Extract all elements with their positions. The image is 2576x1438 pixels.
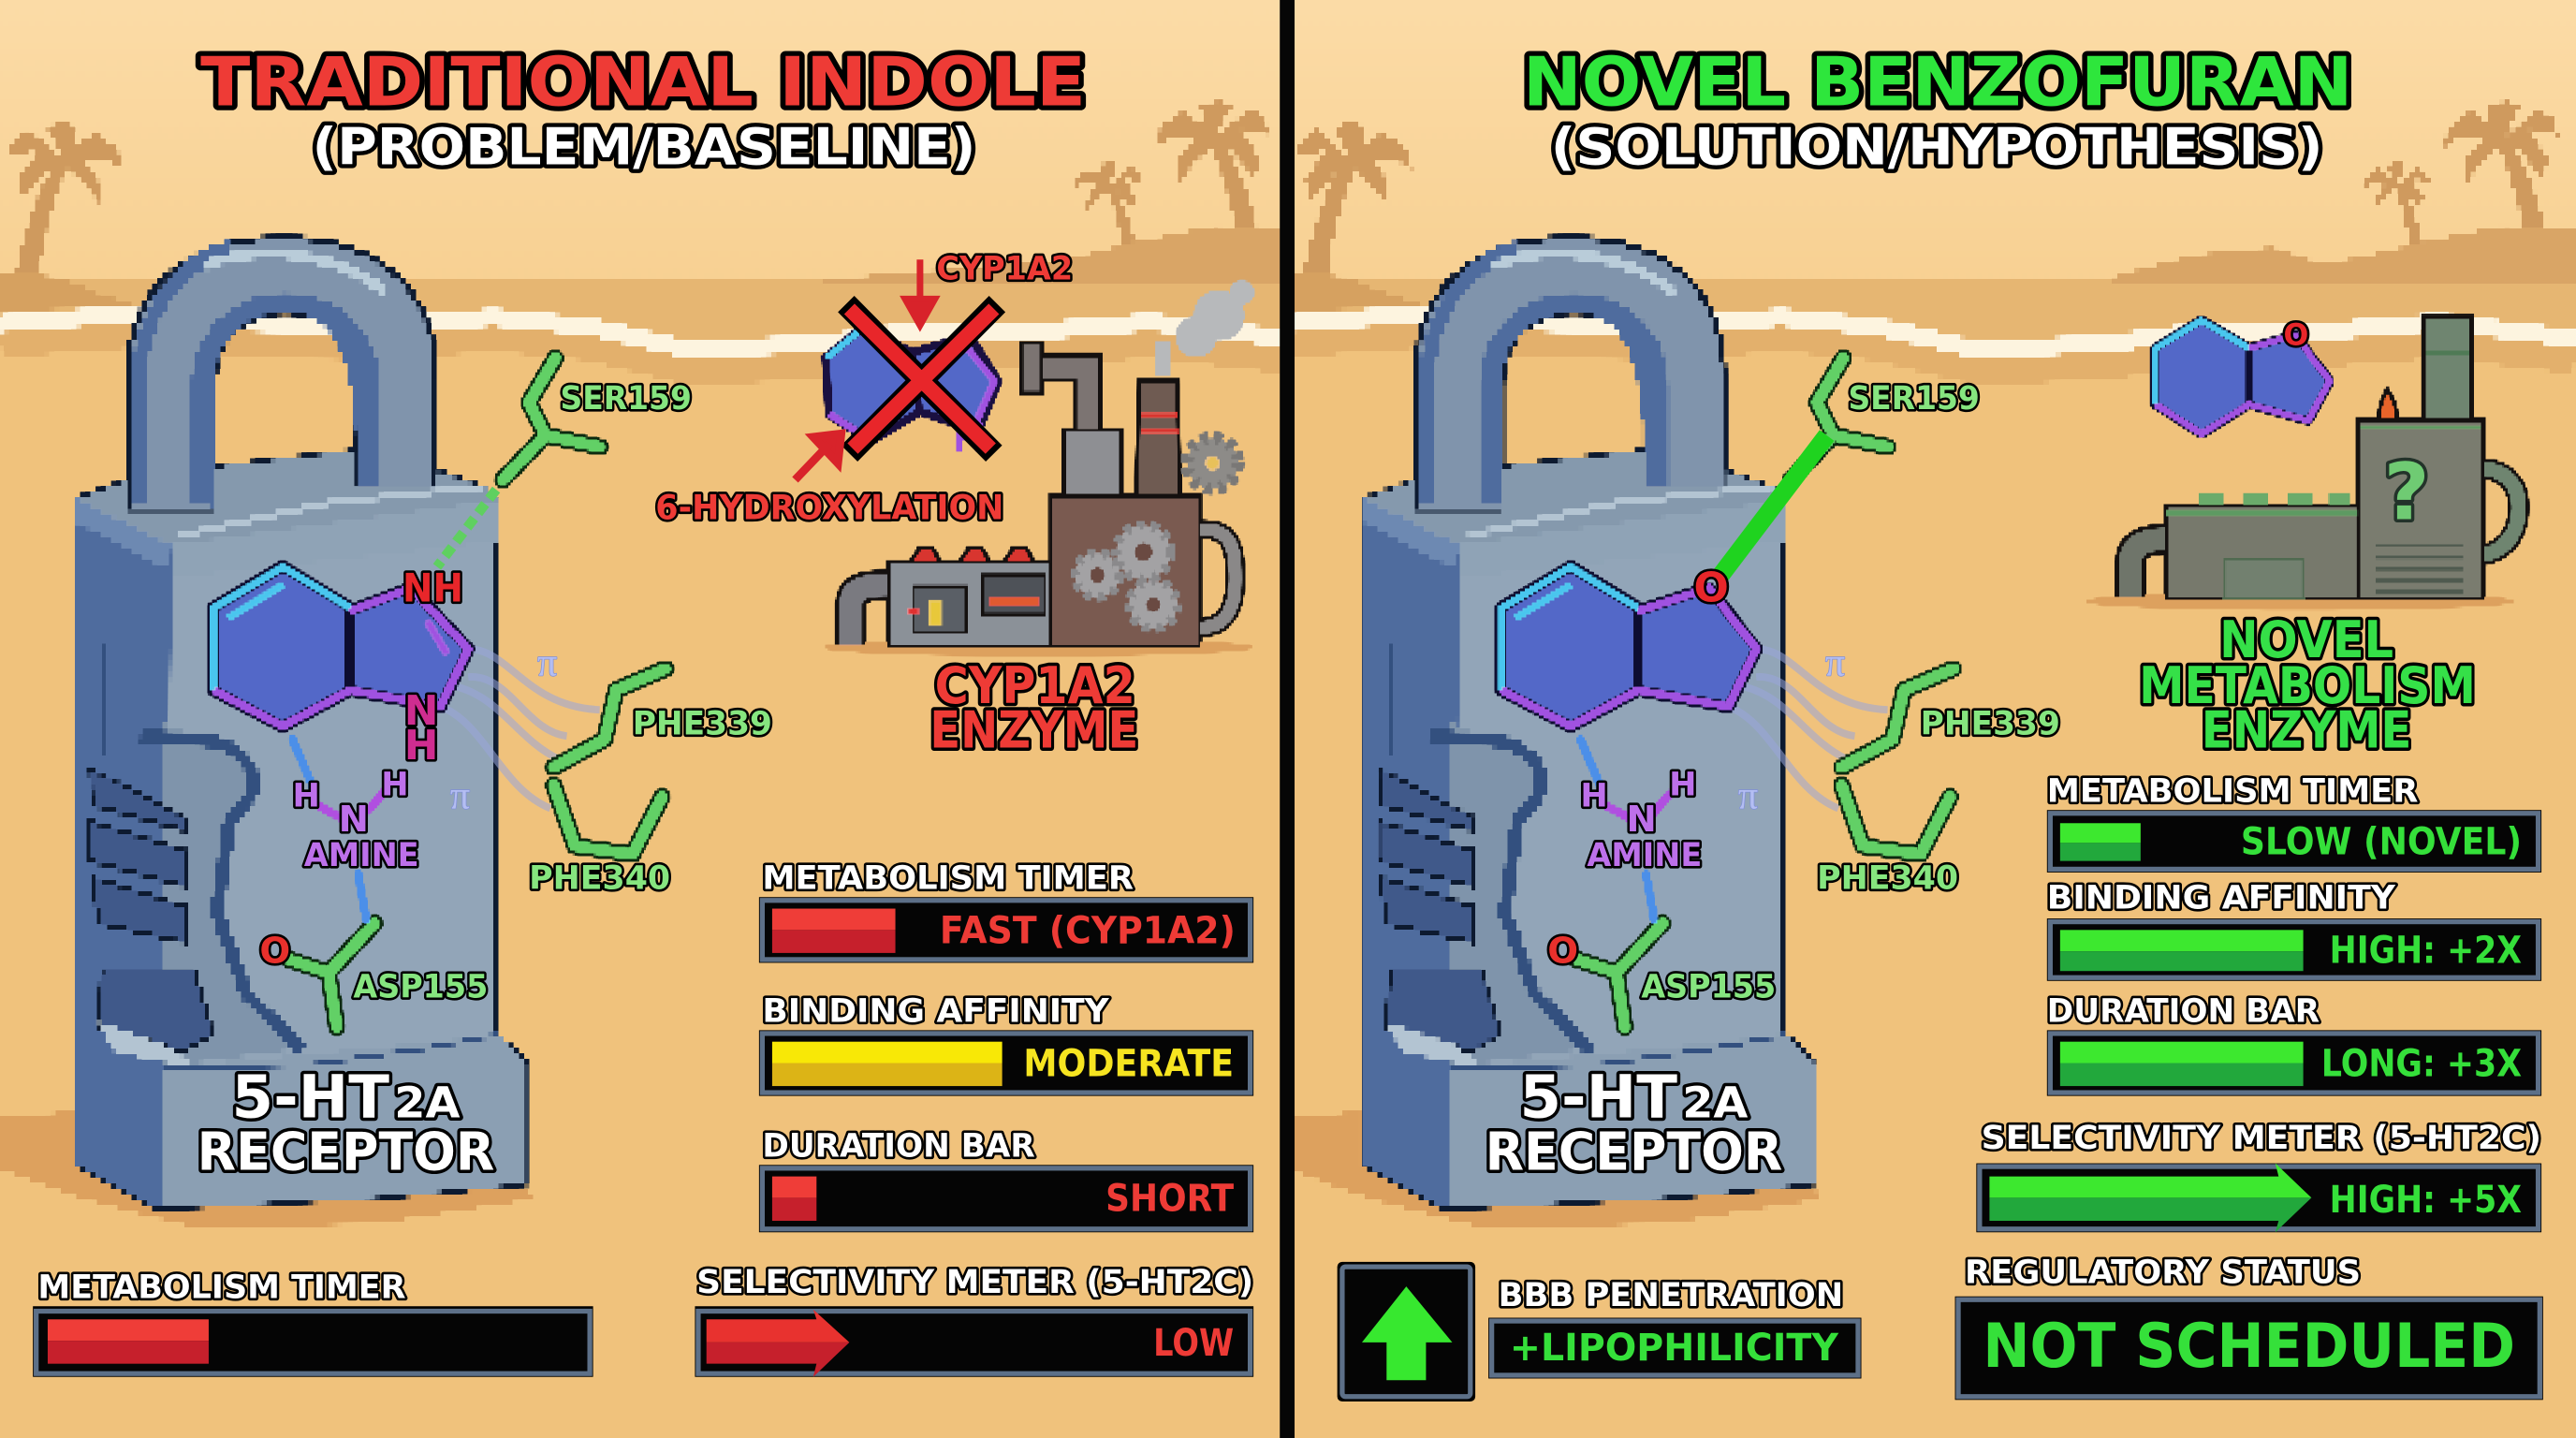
enzyme label [2139,610,2476,760]
receptor lock [78,238,526,1208]
residues and bonds [1577,359,1954,1027]
background: left beach scene [0,0,1288,1438]
metric: bottom metabolism timer [33,1268,593,1377]
metric: duration bar [2047,992,2541,1096]
metric: metabolism timer: METABOLISM TIMER [2047,771,2418,810]
pi stacking waves [1728,649,1888,808]
title: NOVEL BENZOFURAN [1523,42,2352,121]
amine group: H [292,777,320,815]
residue labels: ASP155 [353,967,488,1005]
receptor lock [1365,238,1814,1208]
metric: regulatory status [1955,1254,2543,1400]
amine group: H [1580,777,1608,815]
pi labels [450,640,557,817]
indole NH label: NH [402,565,463,610]
enzyme label: ENZYME [2202,701,2411,760]
enzyme label [929,656,1138,760]
benzofuran molecule in receptor [1501,566,1756,726]
receptor label: 2A [1682,1078,1749,1127]
metric: metabolism timer [759,858,1253,962]
metric: selectivity meter: HIGH: +5X [2330,1178,2522,1222]
enzyme label: METABOLISM [2139,656,2476,715]
amine group: AMINE [304,836,419,874]
metric: duration bar: SHORT [1105,1176,1234,1220]
metric: binding affinity: HIGH: +2X [2330,928,2522,972]
metric: selectivity meter: SELECTIVITY METER (5-HT2C) [1982,1119,2541,1157]
background: right beach scene [1288,0,2576,1438]
factory: CYP1A2 enzyme [825,281,1253,655]
metric: BBB penetration [1488,1276,1862,1378]
residues and bonds [289,359,666,1027]
pi labels [1738,640,1845,817]
hydroxylation label: 6-HYDROXYLATION [655,488,1003,528]
asp155 oxygen: O [259,930,290,972]
amine group: N [339,799,369,841]
blocked benzene molecule [827,304,997,453]
subtitle: (SOLUTION/HYPOTHESIS) [1551,118,2323,177]
enzyme label: ENZYME [929,701,1138,760]
pi labels: π [1738,773,1758,817]
indole N label: H [404,722,439,770]
receptor label: RECEPTOR [1486,1123,1782,1183]
metric: regulatory status: REGULATORY STATUS [1965,1254,2361,1292]
strong hydrogen bond to ser159 [1719,435,1827,579]
pi labels: π [537,640,557,684]
residue labels: PHE339 [1921,704,2060,742]
amine group: AMINE [1587,836,1702,874]
enzyme label: NOVEL [2219,610,2393,669]
residue labels: SER159 [561,379,692,418]
metric: selectivity meter: SELECTIVITY METER (5-HT2C) [696,1263,1253,1301]
indole N label: N [404,687,439,735]
amine group: H [381,765,409,803]
residue labels: PHE339 [633,704,772,742]
metric: metabolism timer [2047,771,2541,873]
amine group [1580,765,1702,874]
receptor label: 2A [394,1078,461,1127]
metric: binding affinity [2047,879,2541,981]
enzyme label: CYP1A2 [935,656,1135,715]
residue labels: PHE340 [529,858,670,897]
free benzofuran molecule: O [2284,319,2308,353]
receptor label: 5-HT [232,1062,389,1131]
amine group: N [1627,799,1657,841]
arrow: hydroxylation [795,433,842,479]
factory: novel metabolism enzyme [2086,317,2519,609]
metric: metabolism timer: METABOLISM TIMER [762,858,1134,897]
metric: duration bar: DURATION BAR [762,1127,1035,1166]
metric: selectivity meter [1976,1119,2541,1232]
pi labels: π [450,773,470,817]
metric: metabolism timer: SLOW (NOVEL) [2241,820,2522,864]
amine group: H [1669,765,1697,803]
metric: binding affinity: BINDING AFFINITY [2047,879,2395,917]
residue labels [353,379,772,1005]
panel: novel benzofuran [1338,42,2543,1401]
receptor label [198,1062,494,1183]
receptor label: 5-HT [1519,1062,1677,1131]
metric: binding affinity: MODERATE [1023,1042,1234,1086]
metric: regulatory status: NOT SCHEDULED [1983,1312,2515,1382]
metric: BBB penetration: +LIPOPHILICITY [1510,1326,1839,1370]
pi stacking waves [440,649,600,808]
metric: bottom metabolism timer: METABOLISM TIMER [37,1268,406,1306]
metric: binding affinity: BINDING AFFINITY [762,992,1109,1031]
residue labels: SER159 [1848,379,1980,418]
CYP1A2 callout: CYP1A2 [936,249,1073,287]
title: TRADITIONAL INDOLE [200,42,1086,121]
metric: selectivity meter: LOW [1153,1321,1234,1365]
metric: selectivity meter [695,1263,1253,1377]
free benzofuran molecule [2156,319,2330,433]
benzofuran oxygen: O [1693,564,1729,611]
pi labels: π [1825,640,1845,684]
residue labels [1641,379,2060,1005]
residue labels: PHE340 [1817,858,1958,897]
metric: BBB penetration: BBB PENETRATION [1499,1276,1843,1314]
amine group [292,765,419,874]
indole molecule [213,566,468,726]
residue labels: ASP155 [1641,967,1776,1005]
BBB arrow icon [1338,1262,1475,1401]
panel: traditional indole [33,42,1253,1377]
question mark on machine: ? [2384,447,2429,538]
metric: binding affinity [759,992,1253,1096]
receptor label: RECEPTOR [198,1123,494,1183]
center divider [1280,0,1295,1438]
asp155 oxygen: O [1547,930,1578,972]
hydrogen bond: weak ser159 [437,490,496,566]
metric: duration bar: LONG: +3X [2321,1042,2522,1086]
metric: duration bar: DURATION BAR [2047,992,2320,1031]
receptor label [1486,1062,1782,1183]
arrow: CYP1A2 attack [905,259,935,325]
subtitle: (PROBLEM/BASELINE) [313,118,976,177]
indole N label [404,687,439,770]
metric: metabolism timer: FAST (CYP1A2) [940,908,1236,952]
metric: duration bar [759,1127,1253,1232]
